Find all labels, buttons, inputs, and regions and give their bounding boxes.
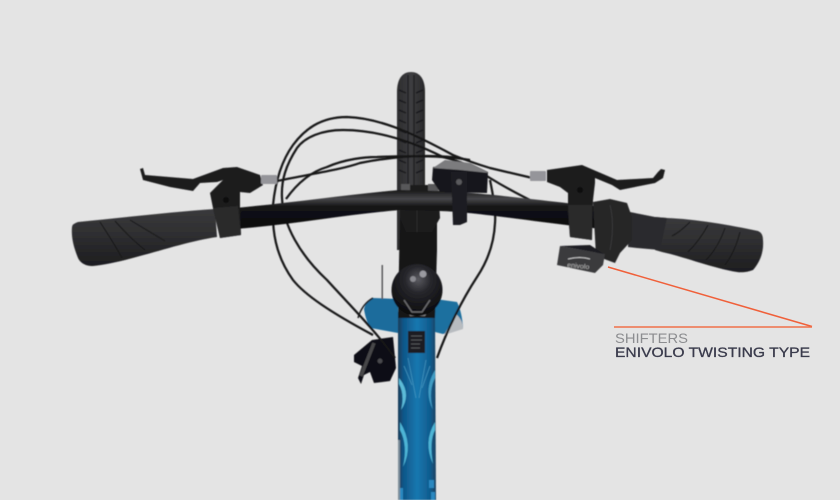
bicycle photograph [72, 72, 763, 500]
right grip [655, 217, 763, 272]
brake caliper [354, 265, 396, 384]
stem [398, 184, 440, 318]
left grip [72, 209, 217, 266]
frame label [408, 331, 425, 353]
callout leader line [608, 267, 812, 327]
callout label: SHIFTERS [615, 330, 688, 346]
blue fender [358, 298, 463, 335]
brake cables [273, 117, 541, 358]
shifter paddle: enivolo [567, 262, 590, 271]
shifter paddle [557, 245, 605, 273]
front tyre [397, 72, 425, 250]
tube graphics [398, 358, 435, 500]
down tube [398, 312, 436, 500]
bell [392, 264, 442, 316]
twist shifter [593, 199, 667, 263]
left brake lever [140, 167, 277, 238]
right bar clamp [432, 160, 489, 225]
right brake lever [530, 165, 665, 240]
handlebar [235, 190, 615, 230]
callout value: ENIVOLO TWISTING TYPE [615, 344, 810, 360]
callout text [615, 330, 810, 360]
